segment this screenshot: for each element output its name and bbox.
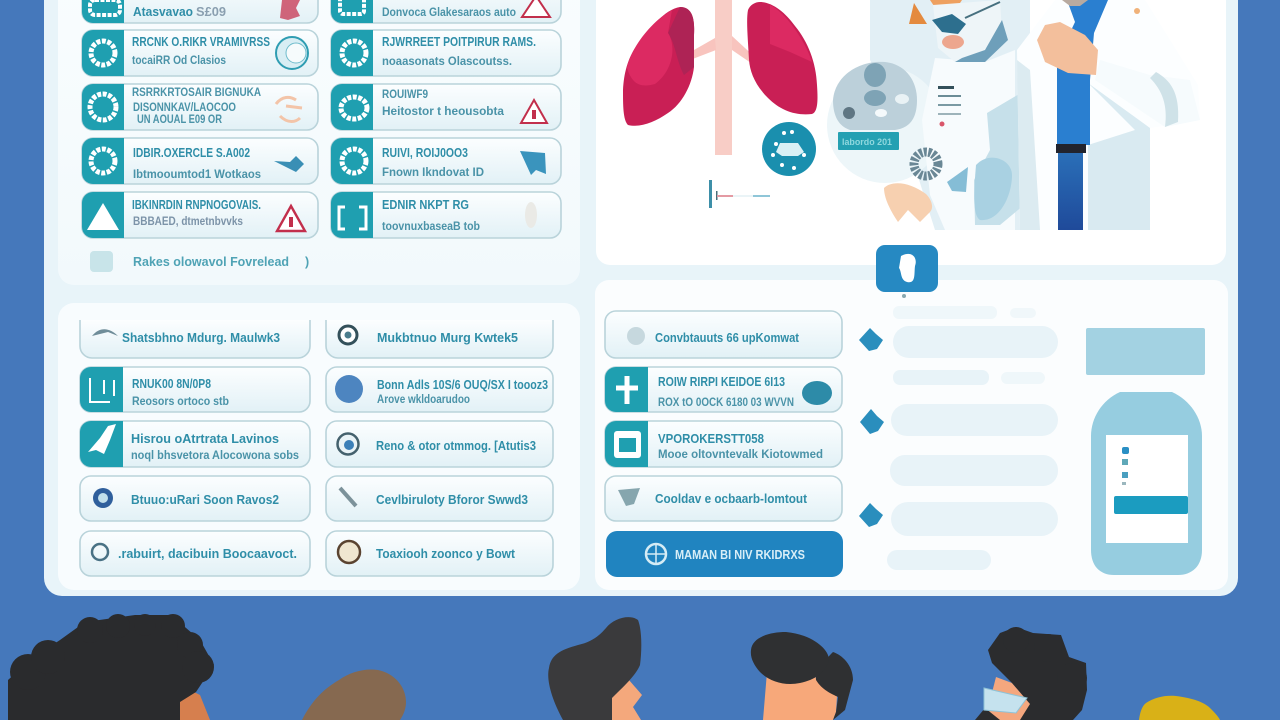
orange accent: [909, 3, 927, 24]
audience silhouettes: [8, 614, 1220, 720]
risk card row 4 right: [331, 192, 561, 238]
right lung: [747, 2, 817, 114]
risk card row 0 left: [82, 0, 318, 23]
risk card row 4 right: toovnuxbaseaB tob: [382, 221, 480, 233]
option card row 0 right: Mukbtnuo Murg Kwtek5: [377, 331, 518, 345]
left lung: [623, 7, 694, 126]
coat badge: [1134, 8, 1140, 14]
option card row 1 left: RNUK00 8N/0P8: [132, 377, 211, 391]
risk card row 0 left: S£09: [196, 5, 226, 19]
bronchi: [687, 36, 771, 74]
risk card row 4 right: EDNIR NKPT RG: [382, 198, 469, 212]
left doctor sleeve: [974, 90, 1030, 225]
risk card row 4 left: IBKINRDIN RNPNOGOVAIS.: [132, 198, 261, 212]
option card row 1 left: Reosors ortoco stb: [132, 396, 229, 408]
risk card row 3 right: RUIVI, ROIJ0OO3: [382, 146, 468, 160]
virus particle: [914, 152, 938, 176]
option card row 1 left: [80, 367, 310, 412]
option card row 2 right: Reno & otor otmmog. [Atutis3: [376, 439, 536, 453]
medicine box: [1086, 328, 1205, 375]
pathway card 3: Mooe oltovntevalk Kiotowmed: [658, 449, 823, 461]
medicine bottle: [1091, 392, 1202, 575]
option card row 4 left: .rabuirt, dacibuin Boocaavoct.: [118, 547, 297, 561]
panel: treatment pathway: [595, 280, 1228, 590]
person 5 skin: [985, 677, 1033, 720]
right doctor coat: [1017, 0, 1200, 230]
bottle label: [1106, 435, 1188, 543]
lungs illustration: [623, 0, 817, 155]
person 6 head: [1139, 696, 1220, 720]
pathway card 2: ROX tO 0OCK 6180 03 WVVN: [658, 397, 794, 409]
pathway card 4: [605, 476, 842, 521]
risk card row 2 right: [331, 84, 561, 130]
option card row 4 right: Toaxiooh zoonco y Bowt: [376, 547, 516, 561]
option card row 2 left: [80, 421, 310, 467]
person 5 glasses: [984, 688, 1027, 713]
person 1 hair: [8, 614, 214, 720]
call-to-action button: [606, 531, 843, 577]
left doctor torso: [922, 50, 1015, 230]
pathway card 4: Cooldav e ocbaarb-lomtout: [655, 492, 808, 506]
risk card row 3 right: Fnown Ikndovat ID: [382, 167, 484, 179]
risk card row 0 right: Donvoca Glakesaraos auto: [382, 7, 516, 19]
right doctor belt: [1056, 144, 1086, 153]
risk card row 1 right: noaasonats Olascoutss.: [382, 56, 512, 68]
risk card row 2 right: ROUIWF9: [382, 89, 428, 101]
person 3 skin: [608, 680, 642, 720]
option card row 3 right: [326, 476, 553, 521]
option card row 0 left: Shatsbhno Mdurg. Maulwk3: [122, 331, 280, 345]
trachea: [715, 0, 732, 155]
call-to-action button: MAMAN BI NIV RKIDRXS: [675, 548, 805, 562]
pathway card 1: [605, 311, 842, 358]
pathway card 2: ROIW RIRPI KEIDOE 6I13: [658, 375, 785, 389]
panel: illustration: [596, 0, 1226, 265]
person 3 hair: [548, 617, 641, 720]
left doctor face: [933, 0, 1002, 62]
option card row 3 right: Cevlbiruloty Bforor Swwd3: [376, 493, 528, 507]
option card row 0 left: [80, 320, 310, 358]
option card row 2 left: Hisrou oAtrtrata Lavinos: [131, 432, 279, 446]
lens label: labordo 201: [842, 137, 892, 147]
risk card row 1 left: [82, 30, 318, 76]
person 1 skin: [176, 690, 210, 720]
right doctor trousers: [1058, 153, 1083, 230]
pale placeholder rows: [887, 306, 1058, 570]
lens label: [838, 132, 899, 150]
risk card row 4 left: [82, 192, 318, 238]
right doctor shirt: [1057, 0, 1108, 145]
callout badge: [876, 245, 938, 298]
risk card row 2 left: DISONNKAV/LAOCOO: [133, 102, 236, 114]
risk card row 2 left: [82, 84, 318, 130]
person 2 head: [302, 669, 406, 720]
risk card row 1 left: RRCNK O.RIKR VRAMIVRSS: [132, 35, 270, 49]
arrow 3: [859, 503, 883, 527]
option card row 3 left: [80, 476, 310, 521]
risk card row 2 left: UN AOUAL E09 OR: [137, 114, 223, 126]
risk card row 1 right: [331, 30, 561, 76]
small scale mark: [709, 180, 770, 208]
risk card row 3 left: [82, 138, 318, 184]
person 4 hair: [751, 632, 853, 720]
risk panel footer note: Rakes olowavol Fovrelead: [133, 255, 289, 269]
risk panel footer note: ): [305, 255, 309, 269]
option card row 3 left: Btuuo:uRari Soon Ravos2: [131, 493, 279, 507]
lens halo: [827, 67, 943, 183]
option card row 1 right: [326, 367, 553, 412]
option card row 0 right: [326, 320, 553, 358]
arrow 1: [859, 328, 883, 351]
arrow 2: [860, 409, 884, 434]
icon: bacteria circle: [762, 122, 816, 176]
bottle label bar: [1114, 496, 1188, 514]
doctors illustration: [827, 0, 1200, 230]
risk card row 1 right: RJWRREET POITPIRUR RAMS.: [382, 35, 536, 49]
risk card row 0 left: Atasvavao: [133, 5, 193, 19]
option card row 2 right: [326, 421, 553, 467]
main sheet: [44, 0, 1238, 596]
right doctor chin: [1062, 0, 1088, 6]
risk card row 2 left: RSRRKRTOSAIR BIGNUKA: [132, 87, 261, 99]
risk card row 1 left: tocaiRR Od Clasios: [132, 55, 226, 67]
risk card row 3 left: Ibtmooumtod1 Wotkaos: [133, 169, 261, 181]
backdrop: [870, 0, 1030, 230]
lens: [833, 62, 917, 130]
person 5 hair: [975, 627, 1087, 720]
risk card row 4 left: BBBAED, dtmetnbvvks: [133, 216, 243, 228]
left doctor hand: [884, 183, 932, 222]
risk panel footer note: [90, 251, 309, 272]
risk card row 0 right: [331, 0, 561, 23]
option card row 4 right: [326, 531, 553, 576]
panel: management options: [58, 303, 580, 590]
option card row 1 right: Bonn Adls 10S/6 OUQ/SX I toooz3: [377, 378, 548, 392]
panel: risk factors: [58, 0, 580, 285]
right doctor hand: [1037, 22, 1098, 75]
option card row 2 left: noql bhsvetora Alocowona sobs: [131, 450, 299, 462]
risk card row 3 left: IDBIR.OXERCLE S.A002: [133, 146, 250, 160]
risk card row 3 right: [331, 138, 561, 184]
option card row 4 left: [80, 531, 310, 576]
pathway card 3: VPOROKERSTT058: [658, 432, 764, 446]
pathway card 2: [605, 367, 842, 412]
pathway card 1: Convbtauuts 66 upKomwat: [655, 331, 800, 345]
right doctor sleeve: [1095, 60, 1200, 127]
risk card row 2 right: Heitostor t heousobta: [382, 106, 505, 118]
pathway card 3: [605, 421, 842, 467]
option card row 1 right: Arove wkldoarudoo: [377, 394, 470, 406]
person 4 skin: [763, 672, 838, 720]
report lines: [938, 86, 961, 126]
